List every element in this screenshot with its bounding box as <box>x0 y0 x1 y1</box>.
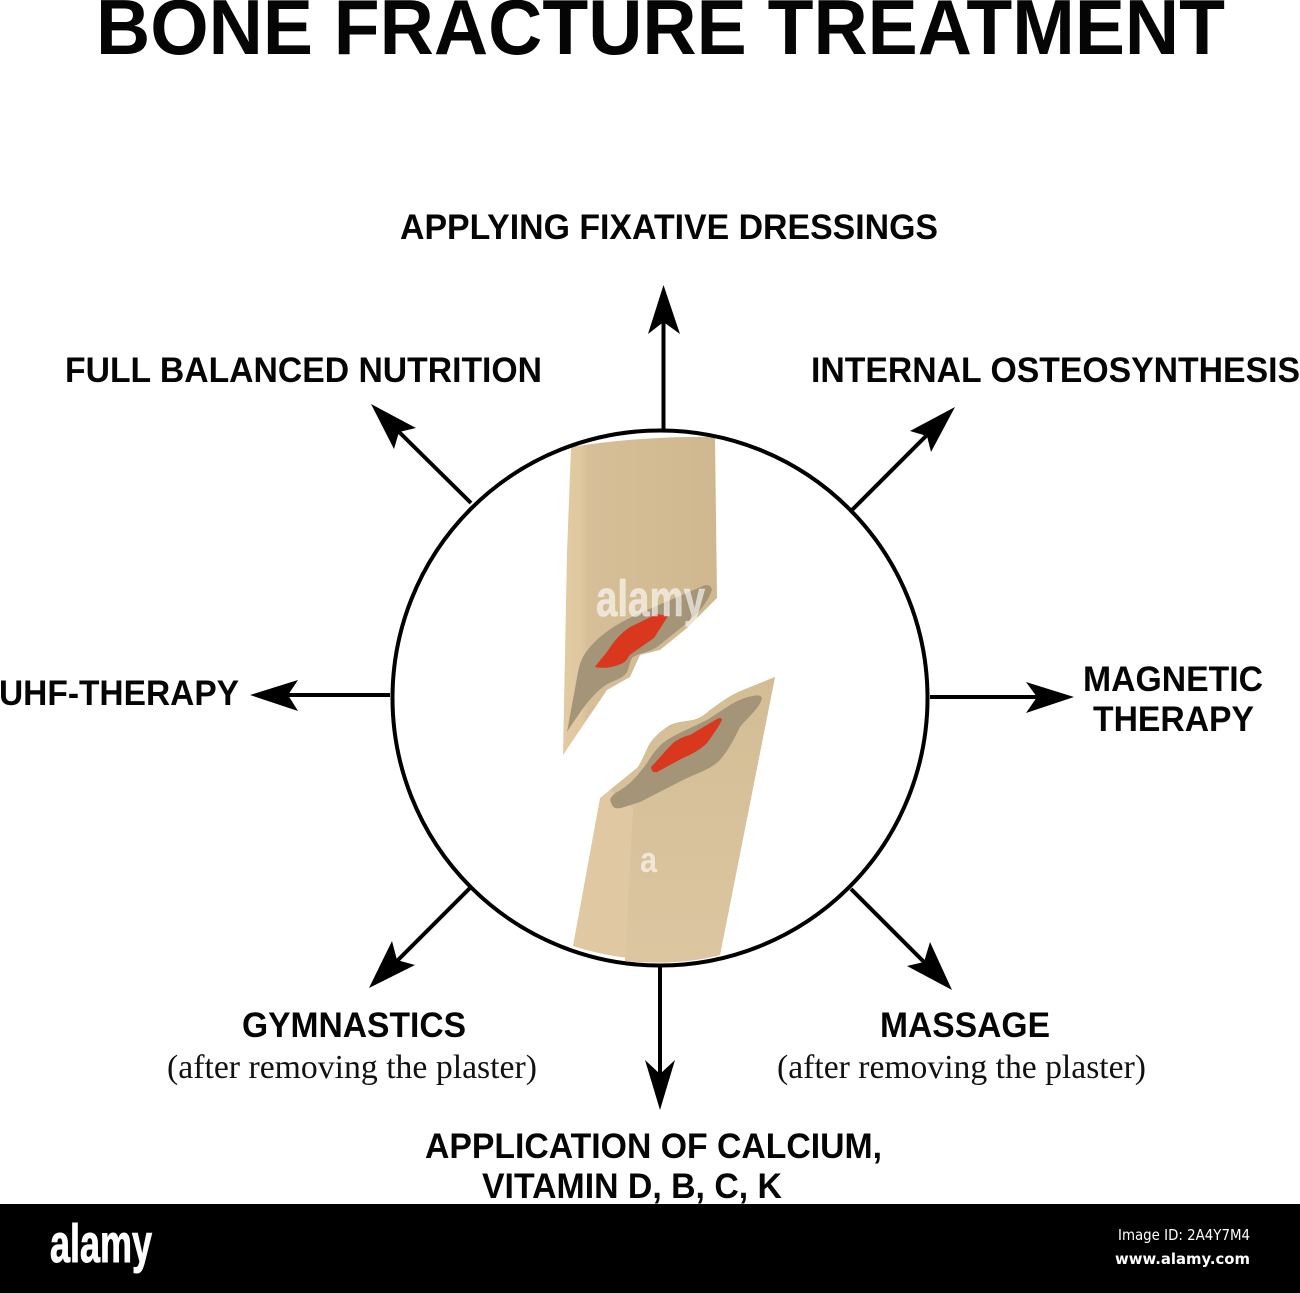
arrow: south-east <box>851 889 952 990</box>
label: massage: MASSAGE <box>880 1006 1050 1045</box>
lower bone fragment <box>573 677 775 963</box>
label: massage <box>777 1006 1146 1086</box>
arrow: west <box>250 680 390 711</box>
arrow: north-east <box>852 407 955 510</box>
arrow: up <box>648 285 680 429</box>
label: full balanced nutrition: FULL BALANCED NUTRITION <box>65 351 542 390</box>
label: application of calcium and vitamins <box>425 1127 882 1206</box>
image id: Image ID: 2A4Y7M4 <box>1118 1226 1250 1244</box>
label: magnetic therapy <box>1083 660 1263 739</box>
label: applying fixative dressings: APPLYING FIXATIVE DRESSINGS <box>400 208 938 247</box>
label: uhf-therapy: UHF-THERAPY <box>0 674 239 713</box>
label: application of calcium and vitamins: APPLICATION OF CALCIUM, <box>425 1127 882 1166</box>
footer band <box>0 1204 1300 1293</box>
label: application of calcium and vitamins: VITAMIN D, B, C, K <box>482 1167 782 1206</box>
label: gymnastics <box>167 1006 537 1086</box>
watermark: alamy <box>596 570 705 627</box>
arrow: east <box>930 682 1074 713</box>
label: massage: (after removing the plaster) <box>777 1049 1146 1086</box>
watermark letter: a <box>640 839 658 880</box>
label: magnetic therapy: THERAPY <box>1093 700 1254 739</box>
arrow: north-west <box>371 404 471 503</box>
label: magnetic therapy: MAGNETIC <box>1083 660 1263 699</box>
arrow: south-west <box>369 888 470 988</box>
label: gymnastics: GYMNASTICS <box>242 1006 466 1045</box>
central circle with fractured bone <box>392 430 928 966</box>
label: gymnastics: (after removing the plaster) <box>167 1049 537 1086</box>
website: www.alamy.com <box>1115 1250 1250 1268</box>
arrow: south <box>645 966 675 1110</box>
footer logo: alamy <box>50 1214 152 1274</box>
upper bone fragment <box>563 437 717 755</box>
circle outline <box>392 430 928 966</box>
